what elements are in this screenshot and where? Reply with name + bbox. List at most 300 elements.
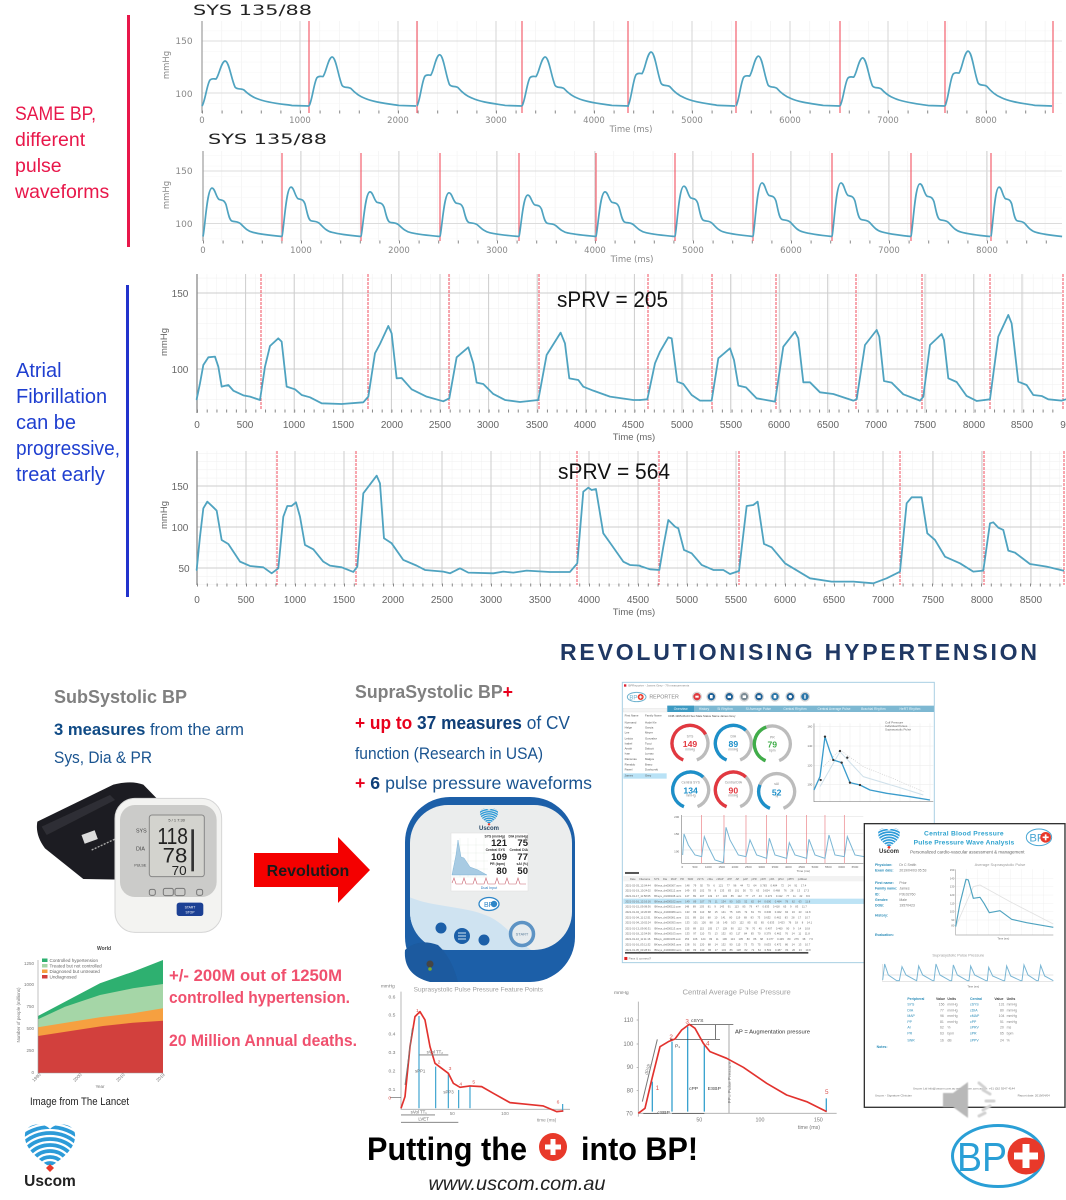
gauges: bpm [769,748,776,752]
reporter average pulse chart [807,720,933,802]
chart: atrial fibrillation sPRV 564: 0 [194,595,200,606]
image: Uscom BP+ device: Central SYS [486,848,506,852]
report values table: Units [947,997,956,1001]
patient list: Garcia [645,725,654,729]
reporter rhythm strip chart: 150 [674,832,679,836]
chart: waveform SYS 135/88 first: 5000 [681,116,703,126]
patient list: Renaldo [625,762,636,766]
chart: waveform SYS 135/88 second: mmHg [162,181,172,209]
chart: waveform SYS 135/88 first: 100 [175,90,193,100]
text block: suprasystolic BP+: SupraSystolic BP+ [355,682,513,702]
report values table: Notes: [877,1045,888,1049]
patient list: Ivan [625,752,630,756]
reporter rhythm strip chart: 4000 [785,865,792,869]
chart: world hypertension stacked area: 2000 [72,1072,83,1083]
chart: world hypertension stacked area: 2010 [115,1072,126,1083]
reporter rhythm strip chart: 0 [681,865,683,869]
patient list: Gonzalez [645,736,658,740]
image: blood pressure cuff and monitor: 78 [163,844,187,868]
chart: waveform SYS 135/88 first: 3000 [485,116,507,126]
report Uscom logo: Uscom [879,849,899,855]
reporter rhythm strip chart: 2000 [732,865,739,869]
gauges [667,720,800,815]
chart: atrial fibrillation sPRV 564: 3000 [480,595,503,606]
chart: atrial fibrillation sPRV 205: 5500 [720,420,743,431]
chart: atrial fibrillation sPRV 205: 7500 [914,420,937,431]
patient list [623,708,667,779]
chart: world hypertension stacked area: Treated but not controlled [50,964,102,968]
report average pulse chart [950,862,1053,940]
image: Uscom BP+ device: 80 [496,866,507,877]
chart: atrial fibrillation sPRV 564: 7500 [922,595,945,606]
report average pulse chart: Time (ms) [997,936,1009,940]
report patient details: 19570423 [899,904,915,908]
chart: central average pulse pressure: Central Average Pulse Pressure [682,989,791,996]
report values table: 20 [1000,1026,1004,1030]
chart: world hypertension stacked area [16,946,166,1089]
chart: central average pulse pressure: 110 [624,1018,634,1024]
chart: atrial fibrillation sPRV 205: 1000 [283,420,306,431]
chart heading: SYS 135/88 first: SYS 135/88 [193,3,312,19]
chart: waveform SYS 135/88 first: mmHg [162,51,172,79]
chart: atrial fibrillation sPRV 205: 5000 [671,420,694,431]
text block: suprasystolic BP+ [355,682,592,793]
reporter rhythm strip chart: 5000 [812,865,819,869]
report patient details: DOB: [875,904,884,908]
report patient details: James [899,887,910,891]
reporter average pulse chart: Individual Pulses [885,724,908,728]
image: Uscom BP+ device: 109 [491,852,507,863]
report values table: mmHg [947,1020,958,1024]
text block: hypertension statistics: +/- 200M out of 1250M [169,966,342,985]
image: Uscom BP+ device: Uscom [479,826,499,832]
chart: atrial fibrillation sPRV 564: 50 [178,564,190,575]
chart: waveform SYS 135/88 second: 5000 [682,246,704,256]
chart: atrial fibrillation sPRV 564: mmHg [159,501,170,529]
text block: subsystolic BP: SubSystolic BP [54,687,187,707]
chart: waveform SYS 135/88 first: 6000 [779,116,801,126]
chart: suprasystolic pulse pressure feature points: sVol TT₁ [411,1109,427,1114]
label: same BP different waveforms [14,103,110,203]
measurements table: 2021-01-18_12:54:56 BKeys_dn000103.uom 133 97 110 75 13 132 83 117 84 83 70 0.379 0.462 76 14 11 11.8 [625,931,810,935]
image: Uscom BP+ device: 77 [517,852,528,863]
chart: central average pulse pressure: cSYS [691,1018,704,1024]
chart: atrial fibrillation sPRV 205: 100 [172,365,189,376]
report values table: bpm [947,1032,954,1036]
chart: world hypertension stacked area: World [97,946,111,952]
gauges: 52 [772,787,782,797]
measurements table: 2021-01-16_12:16:16 BKeys_dn000102.uom 149 89 107 79 11 134 90 105 52 82 64 0.600 0.484 78 62 63 11.8 [625,899,811,903]
reporter logo: REPORTER [649,695,679,701]
chart: central average pulse pressure: time (ms) [798,1125,820,1131]
chart: atrial fibrillation sPRV 205: Time (ms) [613,432,655,443]
reporter rhythm strip chart: 500 [692,865,698,869]
tagline: putting the plus into BP [367,1131,698,1167]
reporter rhythm strip chart: 100 [674,850,679,854]
chart: atrial fibrillation sPRV 564: 2000 [382,595,405,606]
reporter average pulse chart: Cuff Pressure [885,720,904,724]
report values table: cSYS [970,1002,979,1006]
image: Uscom BP+ device: START [516,932,529,936]
report title [910,830,1025,854]
reporter rhythm strip chart: 6000 [838,865,845,869]
reporter rhythm strip chart: Time (ms) [797,869,810,873]
report values table: 16 [940,1038,944,1042]
chart: central average pulse pressure: 4 [706,1041,710,1048]
chart: atrial fibrillation sPRV 564: 7000 [872,595,895,606]
chart: central average pulse pressure: 5 [825,1089,829,1096]
logo: Uscom [0,1115,108,1200]
gauges: Central DIA [725,780,743,784]
chart: suprasystolic pulse pressure feature points: 5 [472,1079,475,1085]
chart: suprasystolic pulse pressure feature points [381,983,570,1123]
image: blood pressure cuff and monitor: 5 / 1 7:30 [168,818,186,823]
chart: atrial fibrillation sPRV 205: 4500 [622,420,645,431]
chart: world hypertension stacked area: 1000 [24,982,34,987]
report values table: 24 [1000,1038,1004,1042]
measurements table: 2021-01-13_09:00:31 BKeys_dn000113.uom 155 89 115 105 17 128 90 112 78 70 45 0.407 0.460 90 9 14 10.8 [625,926,811,930]
gauges: PR [770,735,775,739]
report patient details: Prior [899,881,908,885]
image: blood pressure cuff and monitor: START [185,905,195,909]
report values table: mmHg [1007,1002,1017,1006]
report values table: mmHg [947,1014,958,1018]
reporter tabs: Overview [674,707,688,711]
chart: waveform SYS 135/88 first: 7000 [877,116,899,126]
text block: hypertension statistics: controlled hypertension. [169,988,350,1007]
patient list: First Name [625,714,639,718]
chart: atrial fibrillation sPRV 205: 9 [1060,420,1066,431]
chart: central average pulse pressure [614,989,837,1131]
report values table: 65 [1000,1032,1004,1036]
report average pulse chart: 130 [950,885,955,889]
patient list: Ramunas [625,757,637,761]
chart: central average pulse pressure: mmHg [614,990,629,996]
chart: world hypertension stacked area: Year [95,1084,105,1089]
logo: BP+ [952,1126,1044,1186]
report values table: mmHg [1007,1014,1017,1018]
reporter tabs: Central Average Pulse [817,707,851,711]
chart: suprasystolic pulse pressure feature points: 0.4 [389,1032,396,1038]
report values table: 51 [1000,1020,1004,1024]
patient list: Dalcott [645,746,654,750]
report patient details: Evaluation: [875,933,894,937]
reporter logo [627,692,679,702]
chart: atrial fibrillation sPRV 564 [159,451,1064,618]
gauges: mmHg [685,748,695,752]
report title: Central Blood Pressure [924,830,1004,837]
image: Uscom BP+ device: Dual Input [481,886,497,890]
report values table: bpm [1007,1032,1014,1036]
report values table: ms [1007,1026,1012,1030]
chart: waveform SYS 135/88 second: 7000 [878,246,900,256]
patient list: Isabel [625,741,633,745]
report values table: 96 [940,1014,944,1018]
report values table: MAP [907,1014,916,1018]
report patient details: 2019/04/03 05:53 [899,869,927,873]
report title: Personalized cardio-vascular assessment & management [910,849,1025,854]
patient list: Meyer [645,730,653,734]
label: same BP different waveforms: pulse [15,155,62,177]
report values table: sPRV [970,1026,980,1030]
patient list: Bravo [645,762,653,766]
chart: atrial fibrillation sPRV 205: 7000 [865,420,888,431]
arrow: revolution: Revolution [267,863,349,880]
chart: waveform SYS 135/88 first: 2000 [387,116,409,126]
chart: world hypertension stacked area: 0 [31,1070,34,1075]
report values table: cMAP [970,1014,980,1018]
measurements table: 2021-01-04_11:12:51 BKeys_dn000081.uom 151 89 116 88 10 141 80 119 69 83 73 0.632 0.462 83 28 17 10.7 [625,915,811,919]
report values table: 63 [940,1032,944,1036]
label: atrial fibrillation [16,360,120,486]
chart: atrial fibrillation sPRV 564: 5000 [676,595,699,606]
measurements table [623,876,867,952]
chart: suprasystolic pulse pressure feature points: LVET [418,1117,429,1122]
chart: world hypertension stacked area: Diagnosed but untreated [50,969,100,974]
gauges: mmHg [728,794,738,798]
chart: atrial fibrillation sPRV 205: 0 [194,420,200,431]
measurements table: 2021-01-05_03:28:31 BKeys_dn000063.uom 139 89 130 86 17 134 86 128 82 72 64 0.502 0.487 84 26 23 10.8 [625,948,811,952]
report BP+ logo: BP [1029,833,1044,845]
screenshot: BP+ reporter software: DOB 1965-06-03 Sex Male Status Name James Grey [668,714,736,718]
chart: central average pulse pressure: 150 [814,1118,823,1124]
chart: central average pulse pressure: AP = Augmentation pressure [735,1029,810,1035]
report values table: PP [907,1020,913,1024]
report values table: 80 [1000,1008,1004,1012]
chart: central average pulse pressure: 80 [627,1088,634,1094]
report values table: mmHg [1007,1020,1017,1024]
report patient details: ID: [875,892,880,896]
report values table: Central [970,997,982,1001]
report values table: 104 [999,1014,1005,1018]
reporter toolbar [693,692,809,701]
reporter tabs [667,706,934,712]
measurements table: 2021-01-15_09:08:36 BKeys_dn000111.uom 148 89 103 81 9 143 91 113 85 79 47 0.633 0.418 65 9 83 11.7 [625,905,807,909]
tagline: putting the plus into BP: into BP! [581,1131,698,1167]
chart: world hypertension stacked area: 750 [26,1004,34,1009]
chart: waveform SYS 135/88 second: 3000 [486,246,508,256]
main heading: REVOLUTIONISING HYPERTENSION [560,639,1037,665]
chart: waveform SYS 135/88 second [162,151,1062,265]
label: atrial fibrillation: progressive, [16,438,120,460]
label: same BP different waveforms: SAME BP, [15,103,96,125]
chart: world hypertension stacked area: 250 [26,1048,34,1053]
chart: atrial fibrillation sPRV 564: 500 [238,595,255,606]
document: central blood pressure report [864,824,1065,1107]
chart: suprasystolic pulse pressure feature points: 6 [557,1099,560,1105]
chart: atrial fibrillation sPRV 205: 500 [237,420,254,431]
report patient details: History: [875,914,888,918]
chart: central average pulse pressure: 2 [669,1034,673,1041]
chart: atrial fibrillation sPRV 564: 3500 [529,595,552,606]
chart: suprasystolic pulse pressure feature points: 0.2 [389,1069,396,1075]
report values table: cPP [970,1020,977,1024]
chart: suprasystolic pulse pressure feature points: 4 [459,1082,462,1088]
label: atrial fibrillation: can be [16,412,76,434]
reporter rhythm strip chart: 6500 [852,865,859,869]
text block: subsystolic BP: Sys, Dia & PR [54,749,152,767]
chart: atrial fibrillation sPRV 564: Time (ms) [613,607,655,618]
patient list: Lumao [645,752,654,756]
gauges: 90 [729,786,738,796]
report footer: Uscom Ltd info@uscom.com.au www.uscom.com.au Ph: +61 (0)2 9247 4144 [913,1087,1015,1091]
tagline: putting the plus into BP: Putting the [367,1131,527,1167]
chart: atrial fibrillation sPRV 564: 1000 [284,595,307,606]
report values table: DIA [907,1008,914,1012]
report values table: 131 [999,1002,1005,1006]
report average pulse chart: 100 [950,910,955,914]
chart: atrial fibrillation sPRV 564: 8000 [971,595,994,606]
report patient details: Dr C Smith [899,863,916,867]
chart: atrial fibrillation sPRV 205: 8000 [963,420,986,431]
reporter tabs: SI Rhythm [717,707,733,711]
report values table: 62 [940,1026,944,1030]
report patient details: PJE02760 [899,892,915,896]
patient list: Malgos [645,757,655,761]
report patient details: Gender: [875,898,888,902]
text block: suprasystolic BP+: + up to 37 measures of CV [355,713,570,733]
chart: waveform SYS 135/88 second: 6000 [780,246,802,256]
chart: waveform SYS 135/88 second: 1000 [290,246,312,256]
report values table: mmHg [947,1008,958,1012]
text block: suprasystolic BP+: function (Research in USA) [355,745,543,763]
report values table: dB [947,1038,952,1042]
gauges: sAI [774,782,779,786]
chart: suprasystolic pulse pressure feature points: 0 [388,1095,391,1101]
report average pulse chart: 110 [950,901,955,905]
chart: suprasystolic pulse pressure feature points: sPP1 [415,1069,426,1074]
chart: central average pulse pressure: dP/dt [644,1063,652,1075]
chart: waveform SYS 135/88 second: Time (ms) [610,255,653,265]
image: Uscom BP+ device: 75 [517,838,529,849]
measurements table: Date Filename SYS Dia MAP PR SNR cSYS cDia cMAP cPP AP pAP pPR pRH pPA pPAI pPPV pdDiast [630,877,807,881]
chart: waveform SYS 135/88 second: 2000 [388,246,410,256]
chart: world hypertension stacked area: 500 [26,1026,34,1031]
image: blood pressure cuff and monitor: STOP [185,910,195,914]
chart: suprasystolic pulse pressure feature points: 50 [450,1111,455,1116]
report footer: Uscom - Signature Clinician [875,1093,912,1097]
chart: waveform SYS 135/88 first [162,21,1062,135]
report patient details: Family name: [875,887,897,891]
report values table: cDIA [970,1008,978,1012]
chart: atrial fibrillation sPRV 564: 100 [172,523,189,534]
report values table: SNR [907,1038,915,1042]
reporter average pulse chart: 160 [807,725,813,729]
report pulse strip: Time (ms) [967,984,979,988]
report values table: AI [907,1026,911,1030]
chart: atrial fibrillation sPRV 205: 4000 [574,420,597,431]
report patient details: First name: [875,881,894,885]
report values table: Units [1007,997,1015,1001]
chart: waveform SYS 135/88 second: 4000 [584,246,606,256]
report values table: sPPV [970,1038,979,1042]
chart: waveform SYS 135/88 first: 4000 [583,116,605,126]
image: Uscom BP+ device: PR (bpm) [490,862,505,866]
image: blood pressure cuff and monitor: SYS [136,829,147,835]
reporter tabs: History [699,707,710,711]
gauges: 149 [683,739,697,749]
report average pulse chart: 80 [951,924,955,928]
report patient details: Male [899,898,907,902]
chart: atrial fibrillation sPRV 205: 6500 [817,420,840,431]
report values table: Value [994,997,1003,1001]
chart: suprasystolic pulse pressure feature points: sVol TT₂ [427,1050,443,1055]
patient list: Grey [645,774,652,778]
patient list: Helge [625,725,632,729]
chart: central average pulse pressure: PP= Pulse Pressure [727,1061,732,1103]
report patient details [875,863,927,937]
reporter rhythm strip chart: 5500 [825,865,832,869]
chart: suprasystolic pulse pressure feature points: 3 [449,1066,452,1072]
chart: world hypertension stacked area: 1990 [31,1072,42,1083]
reporter rhythm strip chart: 200 [674,815,679,819]
report values table [877,997,1017,1049]
chart: atrial fibrillation sPRV 564: 5500 [725,595,748,606]
chart: atrial fibrillation sPRV 564: 8500 [1020,595,1043,606]
patient list: Pawel [625,768,633,772]
label: atrial fibrillation: Atrial [16,360,62,382]
label: atrial fibrillation: Fibrillation [16,386,107,408]
report values table: 156 [939,1002,945,1006]
chart: suprasystolic pulse pressure feature points: 2 [438,1059,441,1065]
report values table: sPR [970,1032,977,1036]
patient list: Family Name [645,714,662,718]
chart: world hypertension stacked area: 1250 [24,961,34,966]
patient list: Hodel Ke [645,720,657,724]
report values table: 81 [940,1020,944,1024]
reporter average pulse chart: 120 [807,763,813,767]
logo: BP+: BP [957,1134,1007,1180]
report BP+ logo [1026,829,1052,846]
measurements table: 2021-01-04_13:20:08 BKeys_dn000089.uom 133 83 110 88 15 141 75 106 72 81 79 0.630 0.462 84 16 23 12.8 [625,910,811,914]
reporter tabs: HeRT Rhythm [899,707,921,711]
chart: atrial fibrillation sPRV 564: 1500 [333,595,356,606]
reporter rhythm strip chart: 3000 [758,865,765,869]
chart: atrial fibrillation sPRV 205: 2500 [429,420,452,431]
image: Uscom BP+ device: BP [484,902,494,909]
patient list: Tucci [645,741,652,745]
chart: atrial fibrillation sPRV 205: 150 [172,289,189,300]
reporter rhythm strip chart: 1000 [705,865,712,869]
chart: suprasystolic pulse pressure feature points: 0.6 [389,994,396,1000]
caption: image from the Lancet: Image from The Lancet [30,1096,129,1108]
report average pulse chart: Average Suprasystolic Pulse [975,862,1026,867]
chart: waveform SYS 135/88 first: 1000 [289,116,311,126]
report values table: mmHg [1007,1008,1017,1012]
text block: subsystolic BP [54,687,244,767]
measurements table: 2021-01-17_11:58:05 BKeys_dn000108.uom 147 89 107 119 17 134 85 112 77 27 43 0.272 0.412 77 11 22 8.6 [625,894,810,898]
chart: atrial fibrillation sPRV 564: 4000 [578,595,601,606]
screenshot: BP+ reporter software: Pass & connect? [629,957,651,961]
chart: waveform SYS 135/88 first: 8000 [975,116,997,126]
chart: central average pulse pressure: 50 [696,1118,702,1124]
chart: world hypertension stacked area: 2019 [155,1072,166,1083]
report values table: mmHg [947,1002,958,1006]
chart: central average pulse pressure: 100 [756,1118,764,1124]
image: Uscom BP+ device: 50 [517,866,528,877]
chart: atrial fibrillation sPRV 205: 6000 [768,420,791,431]
measurements table: 2021-02-03_12:04:44 BKeys_dn000007.uom 148 79 92 79 6 121 77 96 44 72 64 0.783 0.484 72 14 91 17.4 [625,884,807,888]
text block: suprasystolic BP+: + 6 pulse pressure waveforms [355,773,592,793]
report values table: Value [936,997,945,1001]
report values table: 77 [940,1008,944,1012]
chart: atrial fibrillation sPRV 205: 3500 [526,420,549,431]
label: atrial fibrillation: treat early [16,464,105,486]
reporter average pulse chart: Suprasystolic Pulse [885,728,911,732]
reporter rhythm strip chart: 1500 [718,865,725,869]
report average pulse chart: 90 [951,918,955,922]
chart: waveform SYS 135/88 first: 150 [175,37,193,47]
